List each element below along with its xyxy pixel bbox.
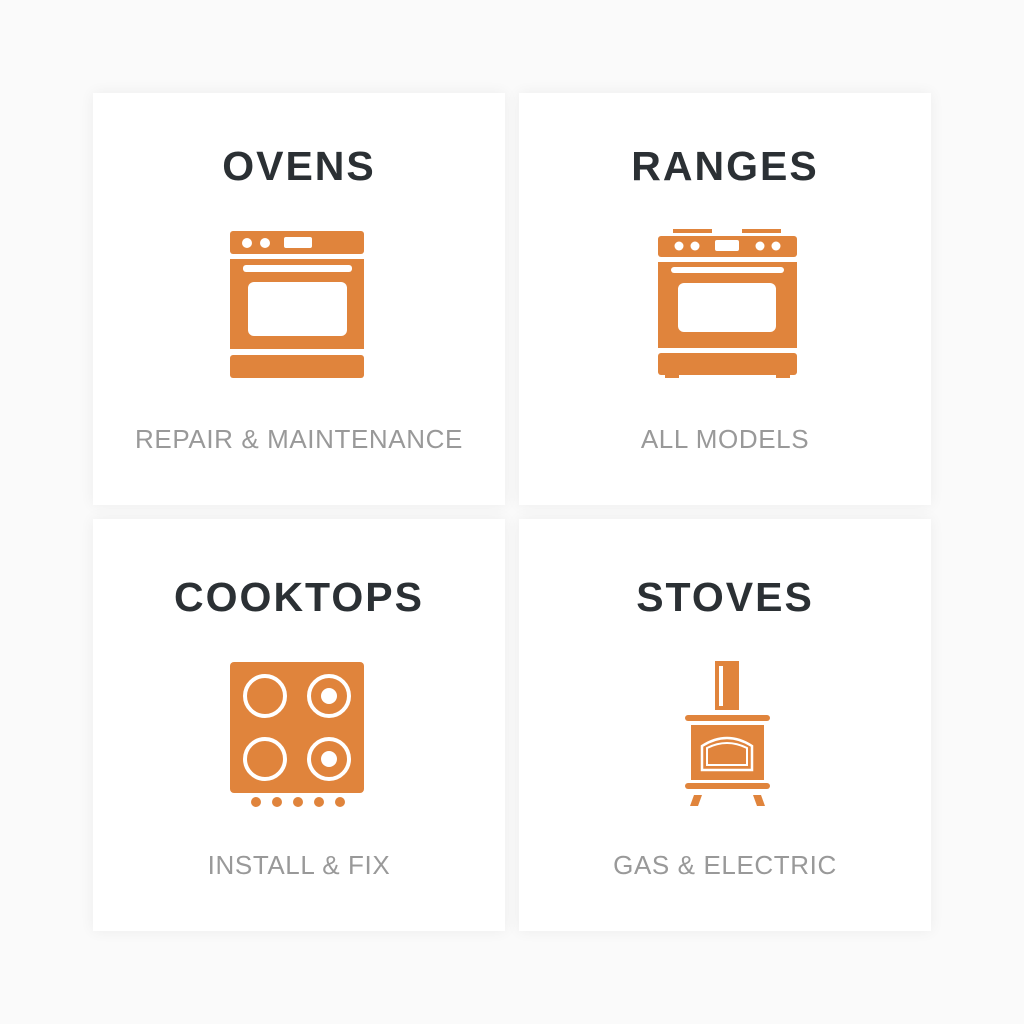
subtitle: ovens: REPAIR & MAINTENANCE	[135, 424, 463, 454]
panel: ovens	[93, 93, 505, 505]
icon: cooktop	[230, 662, 364, 807]
subtitle: cooktops: INSTALL & FIX	[208, 850, 390, 880]
heading: ranges: RANGES	[631, 143, 819, 189]
subtitle: stoves: GAS & ELECTRIC	[613, 850, 837, 880]
icon: range	[658, 229, 797, 378]
panel: cooktops	[93, 519, 505, 931]
icon: oven	[230, 231, 364, 378]
panel: ranges	[519, 93, 931, 505]
heading: cooktops: COOKTOPS	[174, 574, 424, 620]
icon: wood stove	[685, 661, 770, 806]
subtitle: ranges: ALL MODELS	[641, 424, 809, 454]
heading: ovens: OVENS	[222, 143, 376, 189]
heading: stoves: STOVES	[636, 574, 814, 620]
panel: stoves	[519, 519, 931, 931]
